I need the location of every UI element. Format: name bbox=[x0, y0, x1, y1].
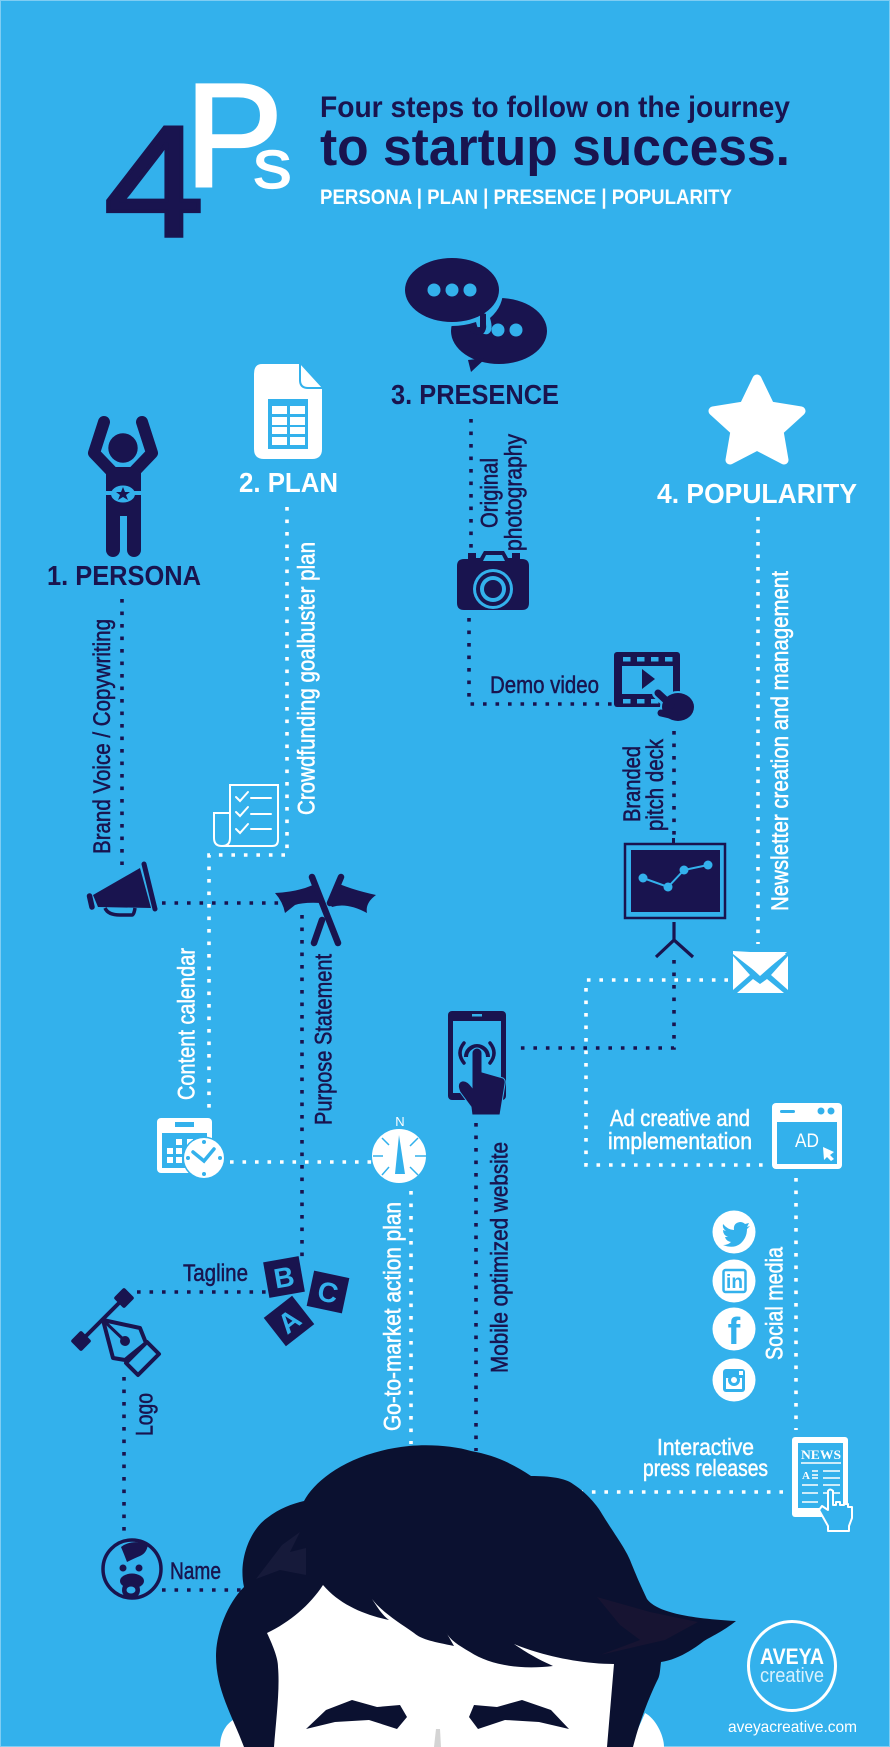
label: Branded pitch deck: Branded bbox=[619, 746, 646, 822]
label: Ad creative and implementation: implementation bbox=[608, 1128, 752, 1154]
label: Mobile optimized website: Mobile optimized website bbox=[486, 1142, 514, 1373]
icon: star bbox=[713, 379, 801, 460]
icon: facebook: f bbox=[728, 1311, 741, 1353]
icon: compass: N bbox=[395, 1114, 405, 1129]
icon: camera bbox=[457, 551, 529, 610]
heading: 1. Persona: 1. PERSONA bbox=[47, 560, 201, 591]
icon: twitter bbox=[712, 1210, 756, 1254]
icon: alphabet blocks bbox=[263, 1256, 349, 1346]
logo: Aveya Creative: creative bbox=[760, 1665, 824, 1687]
icon: ad browser window: AD bbox=[795, 1131, 819, 1152]
title: 4Ps mark: s bbox=[253, 125, 292, 203]
label: Original photography bbox=[476, 434, 528, 551]
label: Tagline: Tagline bbox=[183, 1260, 248, 1287]
label: Logo: Logo bbox=[132, 1393, 158, 1436]
icon: megaphone bbox=[90, 864, 155, 915]
label: Ad creative and implementation: Ad creative and bbox=[610, 1105, 750, 1131]
icon: linkedin bbox=[712, 1260, 756, 1302]
icon: compass bbox=[372, 1114, 426, 1183]
icon: news tablet with hand cursor: NEWS bbox=[801, 1447, 841, 1462]
label: Content calendar: Content calendar bbox=[174, 948, 200, 1100]
heading text bbox=[320, 91, 790, 209]
label: Social media: Social media bbox=[762, 1246, 788, 1360]
label: Ad creative and implementation bbox=[608, 1105, 752, 1154]
heading text: PERSONA | PLAN | PRESENCE | POPULARITY bbox=[320, 186, 732, 209]
label: Crowdfunding goalbuster plan: Crowdfunding goalbuster plan bbox=[294, 542, 320, 815]
icon: mobile phone with hand bbox=[448, 1011, 506, 1115]
icon: speech bubbles bbox=[403, 256, 547, 372]
label: Purpose Statement: Purpose Statement bbox=[310, 954, 338, 1125]
icon: calendar with clock bbox=[157, 1118, 226, 1180]
title: 4Ps mark bbox=[104, 54, 292, 270]
icon: baby with pacifier bbox=[103, 1540, 161, 1599]
heading text: to startup success. bbox=[320, 118, 790, 177]
icon: alphabet blocks: C bbox=[315, 1275, 341, 1310]
illustration: head with hair and eyebrows bbox=[216, 1445, 736, 1747]
icon: ad browser window bbox=[772, 1103, 842, 1169]
icon: envelope bbox=[733, 951, 788, 993]
logo: Aveya Creative: AVEYA bbox=[760, 1644, 824, 1669]
icon: video with hand bbox=[614, 652, 696, 723]
icon: alphabet blocks: A bbox=[272, 1303, 307, 1340]
label: Original photography: Original bbox=[476, 458, 504, 528]
label: Demo video: Demo video bbox=[490, 672, 599, 699]
icon: crossed flags bbox=[275, 877, 376, 943]
icon: linkedin: in bbox=[726, 1272, 743, 1293]
icon: persona hero figure bbox=[94, 422, 152, 557]
heading: 2. Plan: 2. PLAN bbox=[239, 467, 338, 498]
heading text: Four steps to follow on the journey bbox=[320, 91, 790, 124]
title: 4Ps mark: 4 bbox=[104, 94, 204, 270]
label: Name: Name bbox=[170, 1558, 221, 1585]
icon: alphabet blocks: B bbox=[271, 1260, 297, 1295]
icon: checklist bbox=[214, 785, 278, 846]
icon: instagram bbox=[712, 1358, 756, 1402]
icon: pen tool bbox=[70, 1287, 159, 1375]
label: Brand Voice / Copywriting: Brand Voice / Copywriting bbox=[89, 619, 116, 854]
heading: 3. Presence: 3. PRESENCE bbox=[391, 379, 559, 410]
connector lines: white path bbox=[209, 507, 796, 1492]
website url: aveyacreative.com bbox=[728, 1719, 857, 1736]
label: Interactive press releases: press releases bbox=[643, 1455, 768, 1481]
icon: news tablet with hand cursor bbox=[792, 1437, 852, 1531]
label: Go-to-market action plan: Go-to-market action plan bbox=[380, 1202, 406, 1431]
label: Branded pitch deck bbox=[619, 738, 669, 831]
label: Original photography: photography bbox=[500, 434, 528, 551]
connector lines: navy path bbox=[122, 419, 674, 1590]
icon: news tablet with hand cursor: A bbox=[802, 1470, 810, 1482]
icon: presentation board bbox=[625, 838, 725, 957]
logo: Aveya Creative bbox=[748, 1622, 836, 1710]
label: Interactive press releases: Interactive bbox=[657, 1434, 754, 1460]
icon: facebook bbox=[712, 1308, 756, 1353]
title: 4Ps mark: P bbox=[185, 54, 283, 218]
label: Branded pitch deck: pitch deck bbox=[642, 738, 669, 831]
heading: 4. Popularity: 4. POPULARITY bbox=[657, 478, 857, 509]
label: Newsletter creation and management: Newsletter creation and management bbox=[767, 571, 794, 911]
icon: spreadsheet document bbox=[254, 364, 322, 459]
label: Interactive press releases bbox=[643, 1434, 768, 1481]
